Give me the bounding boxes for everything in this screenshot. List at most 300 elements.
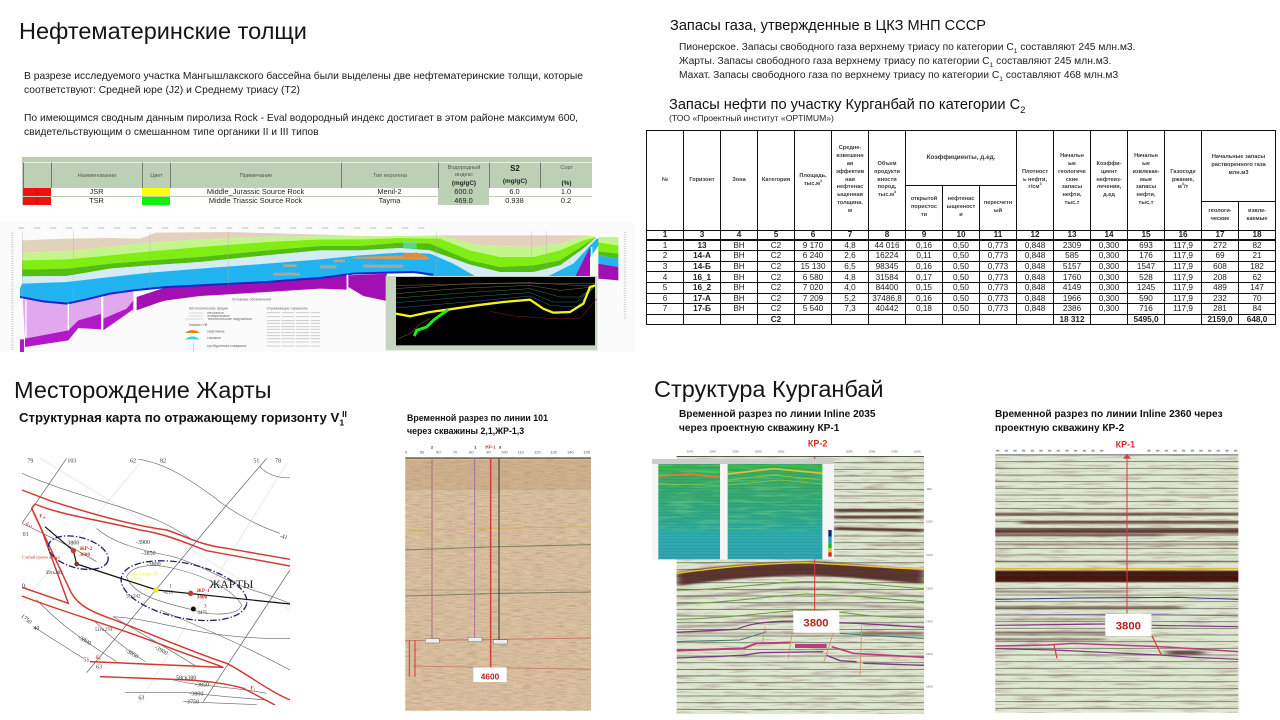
- heading: structural map: Структурная карта по отражающему горизонту V1II: [19, 409, 347, 428]
- text block: gas reserves list: Махат. Запасы свободного газа по верхнему триасу по категории С1 составляют 468 млн.м3: [679, 70, 1118, 83]
- table: oil reserves by horizon: Плотност: [1022, 169, 1048, 175]
- table: oil reserves by horizon: С2: [771, 283, 781, 292]
- text block: gas reserves list: Пионерское. Запасы свободного газа верхнему триасу по категории С1 составляют 245 млн.м3.: [679, 42, 1135, 55]
- table: oil reserves by horizon: 117,9: [1173, 283, 1193, 292]
- map: Zharty structural map: [19, 458, 290, 705]
- axis ticks: 2080: [846, 450, 853, 454]
- map: Zharty structural map: -3800: [147, 562, 161, 568]
- table: oil reserves by horizon: ые: [1142, 161, 1150, 167]
- table: oil reserves by horizon: ВН: [733, 273, 745, 282]
- legend: cross-section notation: Отражающие горизонты: [267, 306, 308, 310]
- table: oil reserves by horizon: нефти,: [1062, 192, 1082, 198]
- table: oil reserves by horizon: 0,848: [1025, 262, 1045, 271]
- table: oil reserves by horizon: 0,773: [988, 241, 1008, 250]
- table: oil reserves by horizon: 0,848: [1025, 304, 1045, 313]
- table: oil reserves by horizon: 2,6: [844, 251, 856, 260]
- table: oil reserves by horizon: геологи-: [1208, 208, 1232, 214]
- table: source rock properties: 469.0: [454, 196, 473, 204]
- table: oil reserves by horizon: 648,0: [1247, 315, 1267, 324]
- table: oil reserves by horizon: 0,50: [953, 304, 969, 313]
- map: Zharty structural map: 5гк242: [126, 594, 141, 599]
- table: oil reserves by horizon: 17-А: [693, 294, 711, 303]
- chart: basin geological cross-section: [11, 228, 626, 352]
- table: source rock properties: Примечание: [240, 173, 272, 179]
- map: Zharty structural map: -3800: [77, 635, 92, 647]
- axis labels: 100: [501, 449, 508, 454]
- table: oil reserves by horizon: 70: [1252, 294, 1262, 303]
- heading: seismic line 101: Временной разрез по линии 101: [407, 413, 548, 423]
- map: Zharty structural map: Слабый приток нефти: [22, 555, 61, 560]
- label: KP-2 well: КР-2: [808, 439, 827, 449]
- table: oil reserves by horizon: нефти,: [1136, 192, 1156, 198]
- axis labels: 110: [517, 449, 525, 454]
- table: oil reserves by horizon: 0,773: [988, 251, 1008, 260]
- table: oil reserves by horizon: продукти: [874, 169, 900, 175]
- table: source rock properties: [22, 157, 592, 205]
- map: Zharty structural map: 4475: [197, 611, 208, 616]
- table: oil reserves by horizon: 1966: [1063, 294, 1081, 303]
- axis labels: ЖР-1: [484, 444, 496, 449]
- axis ticks: 1600: [926, 684, 933, 688]
- table: oil reserves by horizon: 0,50: [953, 273, 969, 282]
- map: Zharty structural map: -3850: [142, 551, 156, 557]
- table: oil reserves by horizon: 0,50: [953, 251, 969, 260]
- axis labels: 0: [405, 449, 408, 454]
- table: oil reserves by horizon: ь нефти,: [1023, 177, 1047, 183]
- table: oil reserves by horizon: 62: [1252, 273, 1262, 282]
- map: Zharty structural map: F₉: [96, 656, 101, 661]
- table: oil reserves by horizon: 0,300: [1099, 251, 1119, 260]
- table: oil reserves by horizon: 5157: [1063, 262, 1081, 271]
- table: source rock properties: Menil-2: [377, 187, 402, 196]
- table: oil reserves by horizon: 5: [663, 283, 667, 292]
- table: oil reserves by horizon: 272: [1213, 241, 1227, 250]
- axis labels: 1: [474, 444, 477, 449]
- table: oil reserves by horizon: 0,50: [953, 283, 969, 292]
- table: oil reserves by horizon: 0,848: [1025, 294, 1045, 303]
- table: source rock properties: 0.938: [505, 196, 524, 204]
- map: Zharty structural map: 63: [138, 695, 144, 701]
- table: oil reserves by horizon: 585: [1065, 251, 1079, 260]
- table: oil reserves by horizon: мые: [1140, 177, 1152, 183]
- table: oil reserves by horizon: 0,848: [1025, 241, 1045, 250]
- table: oil reserves by horizon: открытой: [911, 196, 937, 202]
- table: oil reserves by horizon: 208: [1213, 273, 1227, 282]
- table: oil reserves by horizon: 117,9: [1173, 241, 1193, 250]
- text block: gas reserves list: Жарты. Запасы свободного газа верхнему триасу по категории С1 составляют 245 млн.м3.: [679, 56, 1111, 69]
- axis ticks: 2045: [709, 450, 716, 454]
- table: source rock properties: (mg/gC): [452, 180, 476, 187]
- table: oil reserves by horizon: 0,50: [953, 294, 969, 303]
- table: oil reserves by horizon: 1245: [1137, 283, 1155, 292]
- table: oil reserves by horizon: 84: [1252, 304, 1262, 313]
- axis ticks: 2060: [778, 450, 785, 454]
- map: Zharty structural map: 3: [204, 604, 207, 609]
- heading: inline 2360: проектную скважину КР-2: [995, 422, 1124, 434]
- table: oil reserves by horizon: 0,16: [916, 241, 932, 250]
- inset: burial history chart: [386, 276, 597, 350]
- table: oil reserves by horizon: тыс.т: [1139, 200, 1153, 206]
- axis labels: 140: [567, 449, 574, 454]
- legend: cross-section notation: нефтяные: [207, 330, 225, 334]
- callout: depth 4600: 4600: [481, 671, 500, 681]
- title: Zharty field: Месторождение Жарты: [14, 377, 272, 403]
- text block: source note: (ТОО «Проектный институт «OPTIMUM»): [669, 113, 834, 123]
- table: oil reserves by horizon: 0,300: [1099, 241, 1119, 250]
- table: oil reserves by horizon: 16_2: [693, 283, 711, 292]
- table: source rock properties: Сорг: [560, 165, 573, 171]
- table: oil reserves by horizon: млн.м3: [1229, 170, 1248, 176]
- map: Zharty structural map: 82: [160, 459, 166, 465]
- table: oil reserves by horizon: 6 580: [803, 273, 823, 282]
- table: source rock properties: Тип керогена: [373, 173, 407, 179]
- table: oil reserves by horizon: 82: [1252, 241, 1262, 250]
- table: oil reserves by horizon: ВН: [733, 262, 745, 271]
- table: oil reserves by horizon: лечения,: [1097, 184, 1121, 190]
- table: oil reserves by horizon: [646, 130, 1276, 325]
- table: oil reserves by horizon: 0,11: [916, 251, 932, 260]
- table: oil reserves by horizon: нефтенас: [948, 196, 974, 202]
- table: source rock properties: 1.0: [561, 187, 571, 196]
- table: oil reserves by horizon: С2: [771, 304, 781, 313]
- map: Zharty structural map: 63: [96, 665, 102, 671]
- table: source rock properties: 6.0: [509, 187, 520, 196]
- table: oil reserves by horizon: ВН: [733, 241, 745, 250]
- table: oil reserves by horizon: 14-Б: [693, 262, 711, 271]
- table: oil reserves by horizon: 40442: [876, 304, 898, 313]
- map: Zharty structural map: 40: [33, 626, 39, 632]
- table: oil reserves by horizon: 5495,0: [1133, 315, 1159, 324]
- table: oil reserves by horizon: 693: [1139, 241, 1153, 250]
- table: oil reserves by horizon: пересчетн: [984, 200, 1012, 206]
- legend: cross-section notation: пробуренная скважина: [207, 344, 247, 348]
- table: oil reserves by horizon: ские: [1066, 177, 1078, 183]
- table: oil reserves by horizon: Зона: [732, 177, 746, 183]
- table: oil reserves by horizon: извлекае-: [1132, 169, 1160, 175]
- map: Zharty structural map: -3750: [185, 699, 199, 705]
- axis labels: [405, 444, 591, 454]
- map: Zharty structural map: -3850: [195, 683, 209, 689]
- map: Zharty structural map: 3800: [197, 594, 208, 600]
- table: oil reserves by horizon: ная: [845, 177, 855, 183]
- table: source rock properties: 2: [35, 196, 39, 204]
- table: oil reserves by horizon: 13: [697, 241, 707, 250]
- map: Zharty structural map: 01: [23, 532, 29, 538]
- table: oil reserves by horizon: 21: [1252, 251, 1262, 260]
- map: Zharty structural map: 3600: [79, 552, 90, 558]
- table: oil reserves by horizon: 0,300: [1099, 294, 1119, 303]
- table: source rock properties: (mg/gC): [503, 178, 527, 185]
- axis labels: 50: [420, 449, 425, 454]
- table: source rock properties: Middle_Jurassic Source Rock: [207, 187, 304, 196]
- table: source rock properties: 0.2: [561, 196, 571, 204]
- axis ticks: 2055: [755, 450, 762, 454]
- table: oil reserves by horizon: 3: [663, 262, 667, 271]
- table: oil reserves by horizon: взвешенн: [836, 153, 864, 159]
- legend: cross-section notation: Литологические фации: [189, 306, 228, 310]
- table: oil reserves by horizon: 608: [1213, 262, 1227, 271]
- table: oil reserves by horizon: 0,848: [1025, 283, 1045, 292]
- table: source rock properties: 600.0: [454, 187, 473, 196]
- table: oil reserves by horizon: С2: [771, 241, 781, 250]
- table: oil reserves by horizon: ыщенная: [837, 192, 863, 198]
- text block: source rocks description: свидетельствующим о смешанном типе органики II и III типов: [24, 127, 319, 138]
- callout: depth 4600: [473, 667, 507, 682]
- map: Zharty structural map: -3900: [136, 540, 150, 546]
- table: oil reserves by horizon: Коэффициенты, д.ед.: [926, 154, 996, 161]
- axis ticks: 1000: [926, 520, 933, 524]
- table: oil reserves by horizon: пород,: [878, 184, 896, 190]
- table: oil reserves by horizon: ВН: [733, 251, 745, 260]
- axis ticks: [996, 448, 1238, 453]
- callout: depth 3800: [1105, 614, 1151, 636]
- table: oil reserves by horizon: 0,773: [988, 283, 1008, 292]
- map: Zharty structural map: F₁₀: [39, 514, 46, 519]
- table: oil reserves by horizon: ческие: [1211, 216, 1229, 222]
- table: oil reserves by horizon: ые: [1068, 161, 1076, 167]
- map: Zharty structural map: 4211: [163, 590, 174, 595]
- table: oil reserves by horizon: 0,773: [988, 273, 1008, 282]
- table: oil reserves by horizon: 117,9: [1173, 262, 1193, 271]
- map: Zharty structural map: 79: [27, 459, 33, 465]
- axis labels: 80: [469, 449, 474, 454]
- table: source rock properties: TSR: [89, 196, 104, 204]
- axis ticks: 1400: [926, 620, 933, 624]
- table: oil reserves by horizon: 117,9: [1173, 273, 1193, 282]
- table: oil reserves by horizon: Средне-: [839, 145, 861, 151]
- table: oil reserves by horizon: и: [959, 212, 963, 218]
- table: oil reserves by horizon: 6: [663, 294, 667, 303]
- table: oil reserves by horizon: 0,18: [916, 304, 932, 313]
- table: oil reserves by horizon: ая: [847, 161, 853, 167]
- heading: inline 2360: Временной разрез по линии Inline 2360 через: [995, 409, 1223, 420]
- table: oil reserves by horizon: 0,17: [916, 273, 932, 282]
- table: source rock properties: JSR: [90, 187, 103, 196]
- map: Zharty structural map: 49гк282: [46, 571, 63, 576]
- table: oil reserves by horizon: эффектив: [836, 169, 864, 175]
- table: source rock properties: Наименование: [78, 173, 116, 179]
- map: Zharty structural map: 103: [67, 459, 76, 465]
- label: KP-1 well: КР-1: [1116, 440, 1135, 450]
- callout: depth 3800: [793, 611, 839, 633]
- legend: cross-section notation: газовые: [207, 336, 221, 340]
- table: oil reserves by horizon: 489: [1213, 283, 1227, 292]
- table: oil reserves by horizon: 182: [1250, 262, 1264, 271]
- table: source rock properties: Middle Triassic Source Rock: [209, 196, 302, 204]
- table: oil reserves by horizon: Объем: [878, 161, 896, 167]
- table: oil reserves by horizon: 147: [1250, 283, 1264, 292]
- heading: seismic line 101: через скважины 2,1,ЖР-1,3: [407, 426, 524, 436]
- table: oil reserves by horizon: запасы: [1136, 184, 1156, 190]
- table: oil reserves by horizon: Горизонт: [689, 177, 715, 183]
- table: oil reserves by horizon: 2159,0: [1207, 315, 1233, 324]
- legend: cross-section notation: [185, 298, 320, 351]
- axis ticks: 1300: [926, 586, 933, 590]
- table: oil reserves by horizon: вности: [877, 177, 897, 183]
- table: oil reserves by horizon: 0,16: [916, 294, 932, 303]
- map: Zharty structural map: F₃: [251, 686, 256, 691]
- table: oil reserves by horizon: 6,5: [844, 262, 856, 271]
- table: oil reserves by horizon: 176: [1139, 251, 1153, 260]
- map: Zharty structural map: -3850: [124, 648, 139, 660]
- table: oil reserves by horizon: 0,300: [1099, 304, 1119, 313]
- table: oil reserves by horizon: нефтеиз-: [1096, 177, 1122, 183]
- table: source rock properties: Tayma: [379, 196, 400, 204]
- map: Zharty structural map: 51: [83, 658, 89, 664]
- table: oil reserves by horizon: С2: [771, 273, 781, 282]
- chart: seismic section inline 2035: [652, 439, 1217, 714]
- table: oil reserves by horizon: 1760: [1063, 273, 1081, 282]
- title: oil reserves Kurganbai: Запасы нефти по участку Курганбай по категории С2: [669, 97, 1025, 116]
- table: oil reserves by horizon: 5 540: [803, 304, 823, 313]
- table: oil reserves by horizon: Газосоде: [1170, 169, 1196, 175]
- table: oil reserves by horizon: растворенного газа: [1211, 162, 1266, 168]
- table: oil reserves by horizon: 17-Б: [693, 304, 711, 313]
- title: Kurganbai structure: Структура Курганбай: [654, 376, 883, 402]
- title: approved gas reserves: Запасы газа, утвержденные в ЦКЗ МНП СССР: [670, 18, 986, 34]
- table: oil reserves by horizon: 84400: [876, 283, 898, 292]
- heading: inline 2035: [679, 409, 876, 434]
- table: oil reserves by horizon: 7 209: [803, 294, 823, 303]
- axis ticks: 900: [927, 487, 932, 491]
- table: oil reserves by horizon: тыс.м2: [804, 179, 822, 186]
- table: oil reserves by horizon: 117,9: [1173, 251, 1193, 260]
- table: oil reserves by horizon: 0,848: [1025, 251, 1045, 260]
- axis ticks: 2090: [891, 450, 898, 454]
- table: oil reserves by horizon: 528: [1139, 273, 1153, 282]
- table: oil reserves by horizon: 4,0: [844, 283, 856, 292]
- table: oil reserves by horizon: 2: [663, 251, 667, 260]
- table: oil reserves by horizon: м3/т: [1178, 183, 1188, 190]
- table: oil reserves by horizon: 716: [1139, 304, 1153, 313]
- table: oil reserves by horizon: Коэффи-: [1097, 161, 1121, 167]
- table: oil reserves by horizon: 7,3: [844, 304, 856, 313]
- map: Zharty structural map: -3900: [153, 645, 168, 657]
- text block: source rocks description: соответствуют: Средней юре (J2) и Среднему триасу (T2): [24, 85, 300, 96]
- inset: attribute seismic section: [652, 459, 834, 559]
- map: Zharty structural map: 58гк380: [176, 675, 196, 681]
- axis labels: 90: [486, 449, 491, 454]
- table: oil reserves by horizon: С2: [771, 262, 781, 271]
- table: oil reserves by horizon: 590: [1139, 294, 1153, 303]
- table: source rock properties: S2: [510, 164, 520, 173]
- table: oil reserves by horizon: тыс.м3: [878, 190, 896, 198]
- table: source rock properties: Цвет: [150, 173, 163, 179]
- table: oil reserves by horizon: 44 016: [874, 241, 900, 250]
- axis ticks: 2050: [732, 450, 739, 454]
- table: oil reserves by horizon: 6 240: [803, 251, 823, 260]
- map: Zharty structural map: 62: [130, 459, 136, 465]
- table: oil reserves by horizon: 0,16: [916, 262, 932, 271]
- text block: source rocks description: В разрезе исследуемого участка Мангышлакского бассейна были выделены две нефтематеринские толщи, которые: [24, 71, 583, 82]
- chart: seismic section line 101: [405, 444, 591, 711]
- axis labels: 130: [550, 449, 558, 454]
- map: Zharty structural map: ЖАРТЫ: [209, 577, 254, 591]
- axis ticks: 2085: [869, 450, 876, 454]
- map: Zharty structural map: ЖР-1: [197, 588, 210, 594]
- legend: cross-section notation: Залежи УВ: [189, 323, 208, 327]
- axis ticks: 2095: [914, 450, 921, 454]
- heading: inline 2035: Временной разрез по линии Inline 2035: [679, 409, 876, 420]
- table: oil reserves by horizon: 7: [663, 304, 667, 313]
- map: Zharty structural map: 51: [253, 459, 259, 465]
- table: oil reserves by horizon: циент: [1101, 169, 1117, 175]
- table: oil reserves by horizon: 31584: [876, 273, 898, 282]
- table: oil reserves by horizon: нефтенас: [837, 184, 863, 190]
- table: oil reserves by horizon: С2: [771, 251, 781, 260]
- heading: inline 2035: через проектную скважину КР-1: [679, 422, 839, 434]
- table: oil reserves by horizon: 0,300: [1099, 262, 1119, 271]
- table: oil reserves by horizon: 69: [1215, 251, 1225, 260]
- table: oil reserves by horizon: толщина,: [837, 200, 863, 206]
- heading: seismic line 101: [407, 413, 548, 436]
- map: Zharty structural map: 0.: [22, 584, 27, 590]
- table: oil reserves by horizon: ВН: [733, 304, 745, 313]
- table: oil reserves by horizon: ржание,: [1172, 177, 1194, 183]
- table: oil reserves by horizon: 18 312: [1059, 315, 1085, 324]
- legend: cross-section notation: Условные обозначения: [232, 298, 271, 302]
- callout: depth 3800: 3800: [1116, 620, 1141, 632]
- callout: depth 3800: 3800: [803, 618, 829, 630]
- table: oil reserves by horizon: 16_1: [693, 273, 711, 282]
- table: oil reserves by horizon: тыс.т: [1065, 200, 1079, 206]
- table: oil reserves by horizon: 4149: [1063, 283, 1081, 292]
- map: Zharty structural map: 51гк270: [95, 628, 112, 633]
- table: oil reserves by horizon: 5,2: [844, 294, 856, 303]
- table: oil reserves by horizon: 2309: [1063, 241, 1081, 250]
- table: oil reserves by horizon: 4: [663, 273, 667, 282]
- map: Zharty structural map: 1750: [19, 614, 32, 626]
- table: source rock properties: 1: [35, 187, 39, 196]
- table: oil reserves by horizon: 14-А: [693, 251, 711, 260]
- legend: cross-section notation: тектонические нарушения: [207, 317, 252, 321]
- axis labels: 70: [453, 449, 458, 454]
- map: Zharty structural map: м3/сут: [131, 577, 142, 582]
- axis labels: 3: [499, 444, 502, 449]
- legend: cross-section notation: алевритовые: [207, 314, 230, 318]
- table: oil reserves by horizon: Начальные запасы: [1212, 154, 1265, 160]
- table: oil reserves by horizon: 117,9: [1173, 304, 1193, 313]
- table: oil reserves by horizon: извле-: [1248, 208, 1266, 214]
- table: oil reserves by horizon: 98345: [876, 262, 898, 271]
- axis ticks: 1100: [926, 553, 933, 557]
- table: oil reserves by horizon: м: [848, 208, 852, 214]
- table: oil reserves by horizon: Начальн: [1060, 153, 1084, 159]
- axis labels: 120: [534, 449, 541, 454]
- map: Zharty structural map: ЖР-2: [79, 546, 93, 552]
- table: oil reserves by horizon: 16224: [876, 251, 898, 260]
- table: oil reserves by horizon: 7 020: [803, 283, 823, 292]
- table: oil reserves by horizon: г/см3: [1028, 183, 1042, 190]
- table: oil reserves by horizon: 281: [1213, 304, 1227, 313]
- table: oil reserves by horizon: пористос: [911, 204, 937, 210]
- table: oil reserves by horizon: 0,300: [1099, 283, 1119, 292]
- table: oil reserves by horizon: геологиче: [1058, 169, 1086, 175]
- table: oil reserves by horizon: ыщенност: [947, 204, 975, 210]
- table: oil reserves by horizon: 37486,8: [872, 294, 902, 303]
- table: oil reserves by horizon: 0,773: [988, 262, 1008, 271]
- axis labels: 2: [431, 444, 434, 449]
- table: oil reserves by horizon: 117,9: [1173, 294, 1193, 303]
- table: oil reserves by horizon: С2: [771, 294, 781, 303]
- table: oil reserves by horizon: ВН: [733, 283, 745, 292]
- axis ticks: [687, 450, 933, 688]
- title: source rocks: Нефтематеринские толщи: [19, 18, 307, 44]
- table: oil reserves by horizon: №: [662, 177, 668, 183]
- map: Zharty structural map: -3800: [189, 691, 203, 697]
- table: oil reserves by horizon: 0,50: [953, 262, 969, 271]
- text block: source rocks description: По имеющимся сводным данным пиролиза Rock - Eval водородный индекс достигает в этом районе максимум 600,: [24, 113, 578, 124]
